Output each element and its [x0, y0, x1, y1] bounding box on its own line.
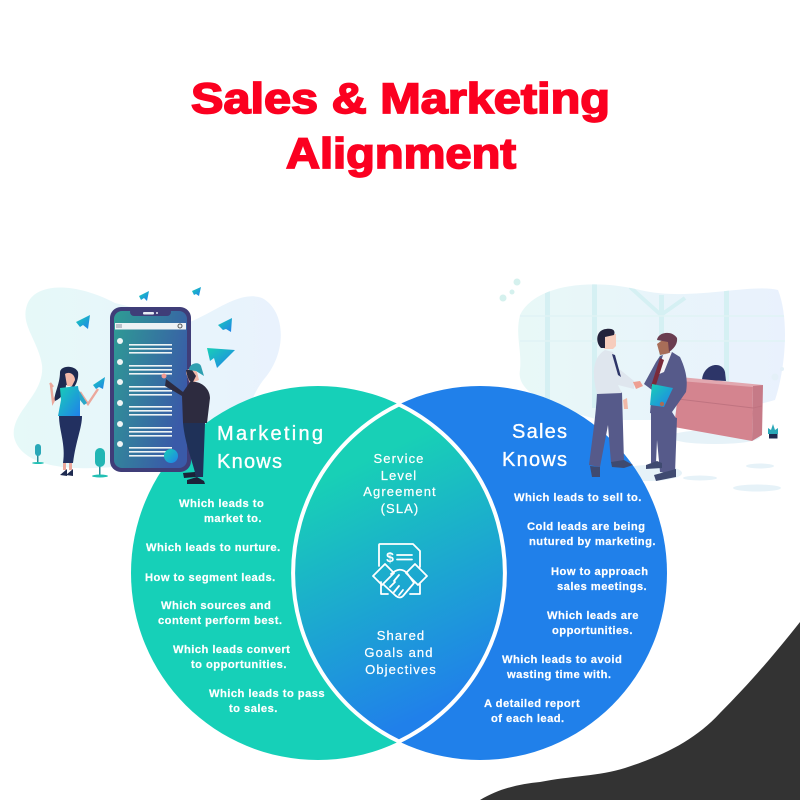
illustration: woman [50, 367, 98, 476]
text: service level agreement: Level [381, 468, 417, 483]
corner shape [480, 622, 800, 800]
icon: contract handshake [373, 544, 427, 598]
heading: marketing knows [217, 423, 323, 473]
text: shared goals and objectives [364, 628, 437, 677]
heading: marketing knows: Knows [217, 451, 282, 473]
list: marketing knows: Which leads to [179, 498, 264, 510]
icons: paper planes [76, 287, 235, 389]
list: sales knows: nutured by marketing. [529, 536, 656, 548]
heading: marketing knows: Marketing [217, 423, 323, 445]
title [191, 75, 610, 178]
list: marketing knows: Which leads to nurture. [146, 542, 281, 554]
illustration: marketing background blob [14, 287, 281, 468]
list: sales knows: sales meetings. [557, 581, 647, 593]
list: sales knows [484, 492, 656, 725]
list: sales knows: opportunities. [552, 625, 633, 637]
list: marketing knows: to opportunities. [191, 659, 287, 671]
text: shared goals and objectives: Objectives [365, 662, 437, 677]
illustration: businessman right [644, 333, 687, 481]
illustration: reception desk [674, 365, 763, 441]
illustration: sales background blob [500, 278, 785, 420]
list: marketing knows: market to. [204, 513, 262, 525]
heading: sales knows: Knows [502, 449, 567, 471]
text: shared goals and objectives: Goals and [364, 645, 434, 660]
list: marketing knows: How to segment leads. [145, 572, 276, 584]
list: sales knows: Which leads are [547, 610, 639, 622]
icons: small trees [32, 444, 108, 478]
circle: marketing [131, 386, 505, 760]
list: marketing knows: Which leads convert [173, 644, 290, 656]
circle: sales [293, 386, 667, 760]
list: sales knows: How to approach [551, 566, 648, 578]
text: shared goals and objectives: Shared [377, 628, 425, 643]
illustration: ground shadows [618, 430, 781, 492]
heading: sales knows [502, 421, 567, 471]
list: sales knows: of each lead. [491, 713, 565, 725]
text: service level agreement: Service [373, 451, 425, 466]
illustration: man pointing at phone [162, 363, 210, 484]
text: service level agreement: (SLA) [381, 501, 419, 516]
list: marketing knows: Which sources and [161, 600, 271, 612]
list: marketing knows [145, 498, 325, 715]
illustration: phone [110, 307, 191, 472]
overlap lens [291, 404, 507, 742]
list: sales knows: Cold leads are being [527, 521, 645, 533]
list: marketing knows: content perform best. [158, 615, 282, 627]
icon: contract handshake: $ [386, 549, 394, 565]
title: Alignment [286, 130, 516, 178]
text: service level agreement [363, 451, 437, 516]
illustration: businessman left [589, 329, 643, 477]
list: sales knows: wasting time with. [506, 669, 611, 681]
text: service level agreement: Agreement [363, 484, 437, 499]
list: sales knows: Which leads to avoid [502, 654, 622, 666]
title: Sales & Marketing [191, 75, 610, 123]
icon: plant [768, 424, 778, 438]
list: sales knows: Which leads to sell to. [514, 492, 642, 504]
list: sales knows: A detailed report [484, 698, 580, 710]
heading: sales knows: Sales [512, 421, 567, 443]
list: marketing knows: Which leads to pass [209, 688, 325, 700]
list: marketing knows: to sales. [229, 703, 278, 715]
